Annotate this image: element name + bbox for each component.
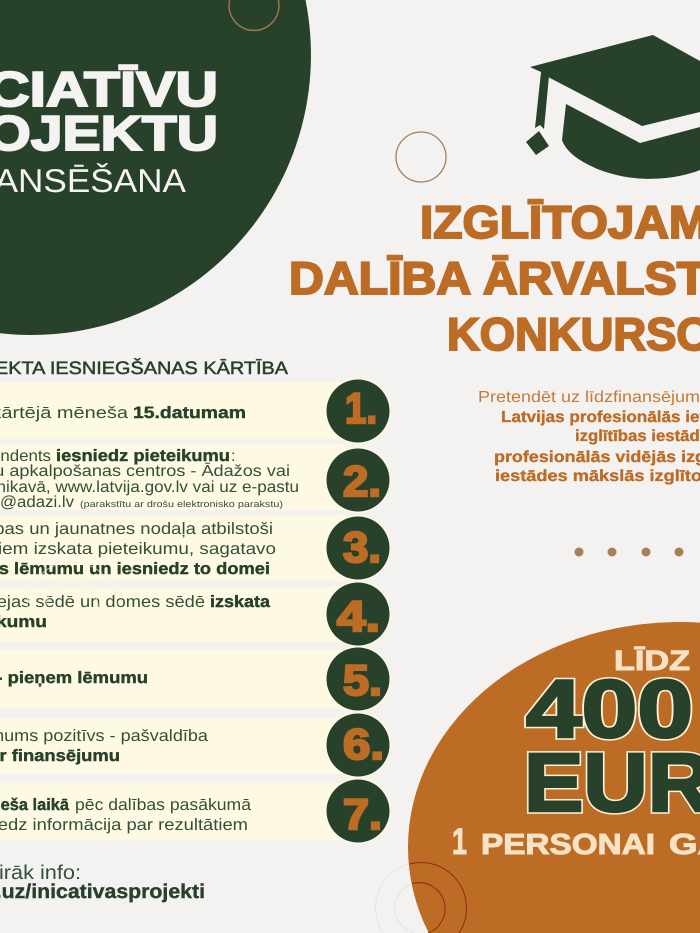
step 1 (0, 378, 391, 444)
step 7: pēc dalības pasākumā (75, 796, 252, 814)
step 2: : (231, 448, 235, 465)
panel: title circle (0, 0, 311, 335)
ring: middle circle outline (396, 132, 446, 182)
dots row (574, 548, 684, 556)
text block: eligible applicants: profesionālās vidējās izg (494, 449, 700, 466)
icon: graduation cap (526, 35, 700, 179)
text block: eligible applicants: izglītības iestāde (575, 428, 700, 445)
decorative pale rings (27, 562, 117, 652)
step 2: (parakstītu ar drošu elektronisko parakstu) (80, 499, 283, 509)
amount: EUR: EUR (524, 736, 700, 829)
step 7: 7. (343, 791, 382, 839)
heading: izglītojamo dalība ārvalstu konkursos (289, 196, 700, 360)
amount: 400: 400 (526, 664, 693, 755)
text block: eligible applicants: iestādes mākslās izglītoj (495, 468, 700, 485)
text block: eligible applicants: Pretendēt uz līdzfinansējumu (478, 389, 700, 406)
ring: top circle outline (229, 0, 279, 30)
step 5 (0, 646, 391, 712)
amount: per person per year: 1 (452, 821, 467, 862)
amount: up to: LĪDZ (614, 645, 690, 676)
step 2: 2. (343, 458, 381, 506)
step 2: iesniedz pieteikumu (56, 447, 230, 465)
step 7 (0, 778, 391, 844)
amount: EUR: EUR (524, 736, 700, 829)
step 3 (0, 515, 391, 581)
step 4 (0, 581, 391, 647)
step 5: 5. (343, 657, 382, 705)
step 1: 15.datumam (133, 404, 246, 422)
step 6: 6. (343, 721, 384, 769)
step 6 (0, 712, 391, 778)
amount: 400: 400 (526, 664, 693, 755)
amount: per person per year (452, 821, 700, 862)
step 3: 3. (343, 524, 381, 572)
text block: eligible applicants (478, 389, 700, 485)
title: iniciatīvu projektu (0, 63, 218, 161)
step 4: 4. (337, 593, 380, 641)
step 1: 1. (345, 385, 377, 433)
step 4: izskata (210, 593, 271, 611)
panel: amount oval (408, 622, 700, 933)
amount: per person per year: PERSONAI (481, 829, 655, 861)
step 2 (0, 444, 391, 513)
more info link (0, 862, 205, 903)
text block: eligible applicants: Latvijas profesionālās iev (501, 409, 700, 426)
decorative bottom rings (376, 862, 466, 933)
